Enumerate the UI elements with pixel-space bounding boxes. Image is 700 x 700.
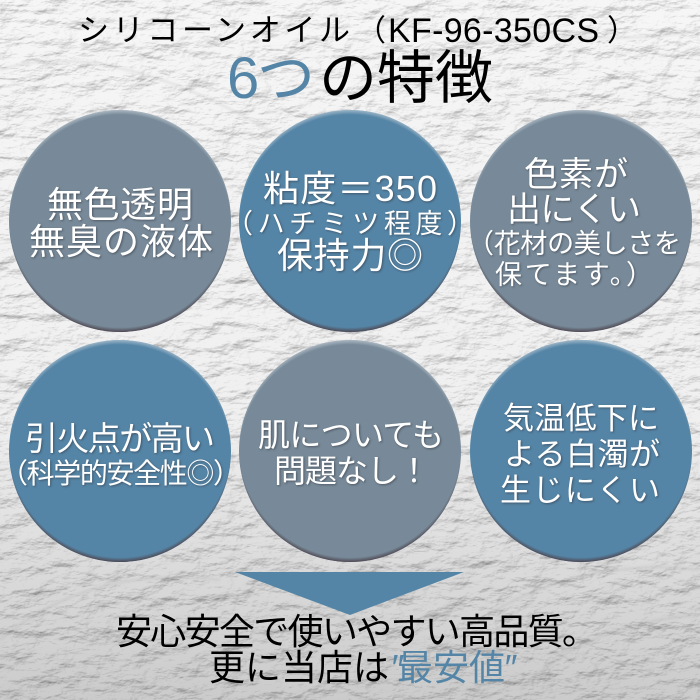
panel: resists clouding at low temperature: 生じにくい bbox=[500, 473, 660, 508]
panel: pigment does not bleed bbox=[467, 110, 692, 332]
panel: viscosity: 粘度＝350 bbox=[263, 168, 437, 209]
panel: pigment does not bleed: （花材の美しさを bbox=[467, 229, 681, 259]
conclusion text: ″ bbox=[390, 647, 404, 688]
panel: high flash point bbox=[0, 340, 241, 562]
conclusion text: 最安値 bbox=[397, 647, 505, 688]
panel: colorless and odorless: 無臭の液体 bbox=[29, 221, 213, 262]
panel: viscosity: 保持力◎ bbox=[277, 235, 423, 276]
conclusion text: 更に当店は bbox=[209, 647, 389, 688]
panel: pigment does not bleed: 出にくい bbox=[507, 191, 641, 229]
panel: colorless and odorless bbox=[9, 110, 231, 332]
panel: resists clouding at low temperature: よる白濁が bbox=[504, 437, 660, 472]
panel: colorless and odorless: 無色透明 bbox=[47, 184, 193, 225]
arrow: pointing down bbox=[235, 572, 464, 615]
panel: resists clouding at low temperature bbox=[470, 340, 692, 562]
heading: six features: 6つ bbox=[227, 46, 315, 111]
title: product name: KF-96-350CS bbox=[388, 12, 599, 50]
conclusion text: ″ bbox=[503, 647, 517, 688]
panel: viscosity bbox=[226, 110, 474, 332]
title: product name bbox=[78, 12, 637, 50]
conclusion text bbox=[116, 611, 598, 688]
panel: resists clouding at low temperature: 気温低下に bbox=[503, 401, 659, 436]
title: product name: ） bbox=[607, 15, 637, 48]
panel: safe on skin: 肌についても bbox=[258, 417, 444, 453]
heading: six features bbox=[227, 46, 493, 111]
title: product name: （ bbox=[356, 15, 386, 48]
title: product name: シリコーンオイル bbox=[78, 13, 350, 48]
panel: pigment does not bleed: 色素が bbox=[524, 156, 628, 194]
panel: safe on skin: 問題なし！ bbox=[274, 453, 430, 489]
panel: safe on skin bbox=[239, 340, 461, 562]
panel: pigment does not bleed: 保てます。） bbox=[495, 260, 653, 290]
heading: six features: の特徴 bbox=[319, 46, 493, 111]
panel: high flash point: 引火点が高い bbox=[25, 420, 215, 457]
panel: high flash point: （科学的安全性◎） bbox=[0, 458, 241, 489]
panel: viscosity: （ハチミツ程度） bbox=[226, 209, 474, 239]
conclusion text: 安心安全で使いやすい高品質。 bbox=[116, 611, 598, 652]
